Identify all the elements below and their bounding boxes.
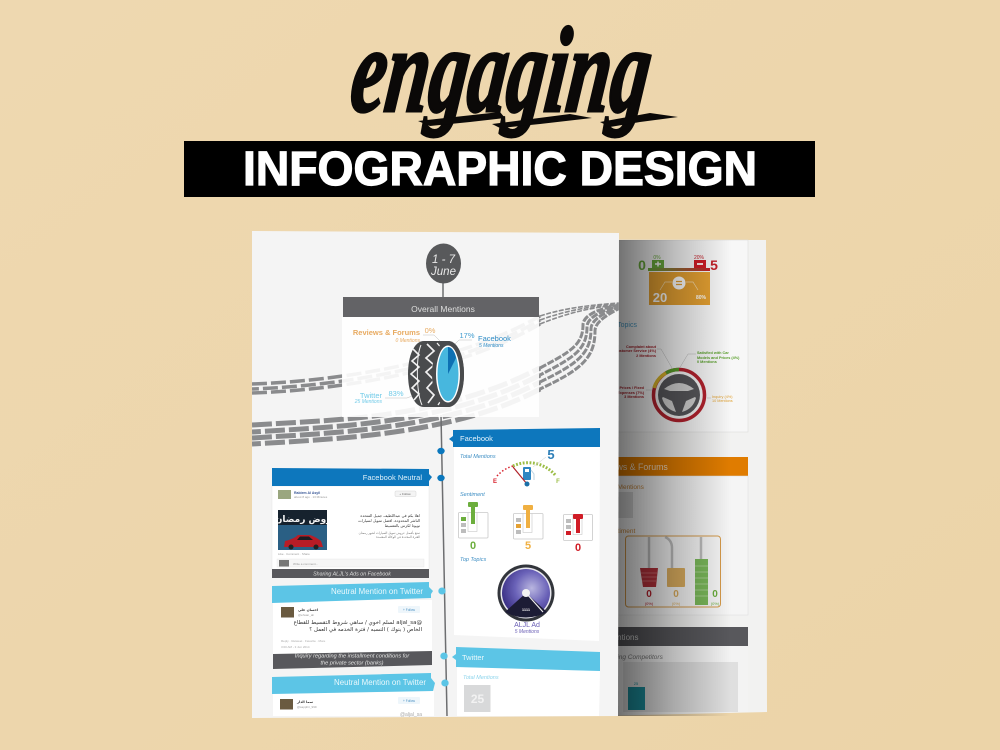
tweet two: + Follow	[403, 699, 416, 703]
tweet two	[280, 697, 422, 718]
facebook header	[449, 428, 600, 447]
panel: reviews sentiment pedals: 0	[646, 589, 652, 600]
back page shadow	[616, 240, 731, 716]
label: twitter	[354, 389, 412, 405]
panel: battery sentiment: 0%	[653, 255, 661, 261]
panel: top topics steering wheel: Complaint about	[626, 345, 657, 349]
panel: competitors chart	[596, 646, 748, 712]
panel: top topics steering wheel: Satisfied with Car	[697, 351, 729, 355]
facebook post: الناشر المحدودة، افضل تمويل لسيارات	[358, 518, 420, 523]
panel: battery sentiment: 20	[653, 290, 667, 305]
twitter one caption: the private sector (banks)	[320, 660, 384, 666]
shifter: negative: 0	[575, 542, 581, 554]
panel: top topics steering wheel	[604, 322, 740, 420]
facebook neutral header: Facebook Neutral	[363, 473, 422, 482]
timeline dots	[437, 448, 449, 686]
header: reviews and forums	[594, 457, 748, 476]
total mentions fuel gauge: Total Mentions	[460, 454, 496, 460]
twitter one header: Neutral Mention on Twitter	[331, 587, 423, 596]
panel: competitors chart: Regarding Competitors	[596, 654, 664, 661]
panel: twitter summary	[452, 647, 600, 716]
facebook panel body	[454, 447, 600, 641]
label: facebook: 17%	[459, 331, 475, 340]
label: facebook: 5 Mentions	[479, 343, 504, 349]
twitter one header	[272, 582, 433, 603]
facebook neutral caption: Sharing ALJL's Ads on Facebook	[313, 572, 391, 578]
panel: reviews sentiment pedals: (0%)	[711, 601, 720, 606]
twitter header	[452, 647, 600, 671]
facebook post: تمتع بأفضل عروض تمويل السيارات لشهر رمضان	[359, 530, 420, 535]
facebook post: Rabiem Al Asyil	[294, 491, 320, 495]
panel: top topics steering wheel: Models and Prices (4%)	[697, 356, 740, 360]
tweet one: @aljal_sa لسلم اخوي / ساهي شروط التقسيط للقطاع	[294, 620, 422, 626]
panel: reviews sentiment pedals	[600, 476, 748, 615]
label: reviews and forums: 0%	[425, 326, 436, 335]
twitter two body	[273, 691, 434, 716]
facebook post	[275, 490, 424, 567]
title: engaging	[345, 3, 678, 138]
twitter header: Twitter	[462, 653, 485, 662]
facebook neutral body	[272, 486, 429, 570]
panel: battery sentiment: 20%	[694, 255, 705, 261]
total mentions fuel gauge: 5	[547, 447, 555, 462]
panel: battery sentiment: 5	[710, 257, 718, 273]
tweet two: سما الدار	[296, 700, 314, 704]
panel: top topics steering wheel: 3 Mentions	[624, 395, 644, 399]
panel: top topics steering wheel: Expenses (7%)	[617, 391, 645, 395]
date badge	[426, 244, 461, 284]
label: twitter: 25 Mentions	[354, 399, 382, 405]
tweet two: @sapphir_999	[297, 705, 317, 709]
label: reviews and forums: Reviews & Forums	[353, 328, 420, 337]
overall mentions header: Overall Mentions	[411, 304, 475, 314]
tweet one: @ehsan_ali	[298, 613, 314, 617]
tweet one: Reply · Retweet · Favorite · More	[281, 639, 326, 643]
header: mentions	[600, 627, 748, 646]
twitter two header	[272, 673, 435, 694]
label: twitter: 83%	[388, 389, 404, 398]
twitter total mentions	[463, 675, 499, 712]
sentiment gear shifters	[458, 492, 592, 554]
total mentions fuel gauge: E	[493, 479, 497, 485]
tweet one: الخاص ( بنوك ) النسبه / فترة الخدمه في العمل ؟	[309, 627, 422, 633]
post image: عروض رمضان	[275, 515, 338, 525]
date badge: 1 - 7	[432, 254, 456, 266]
card: facebook neutral	[272, 468, 432, 578]
post image	[278, 510, 327, 550]
shifter: neutral: 5	[525, 540, 531, 552]
top topics speedometer: ALJL Ad	[514, 622, 540, 629]
facebook neutral caption	[272, 569, 429, 578]
label: twitter: Twitter	[360, 391, 382, 400]
panel: battery sentiment: 0	[638, 257, 646, 273]
facebook post: Like · Comment · Share	[278, 552, 310, 556]
twitter one body	[273, 600, 432, 654]
panel: reviews sentiment pedals: (0%)	[672, 601, 681, 606]
total mentions fuel gauge: F	[556, 479, 560, 485]
panel: top topics steering wheel: Customer Service (4%)	[615, 349, 657, 353]
top topics speedometer: 1111	[522, 607, 531, 612]
panel: reviews sentiment pedals: 0	[712, 589, 718, 600]
facebook header: Facebook	[460, 434, 493, 443]
front page	[252, 231, 620, 718]
twitter total mentions: Total Mentions	[463, 675, 499, 681]
twitter panel body	[457, 667, 600, 716]
top topics speedometer: 5 Mentions	[515, 629, 540, 635]
panel: reviews sentiment pedals: Sentiment	[606, 528, 635, 535]
facebook neutral header	[272, 468, 432, 486]
date badge: June	[430, 266, 456, 278]
header: reviews and forums: Reviews & Forums	[594, 462, 668, 472]
panel: reviews sentiment pedals: (0%)	[645, 601, 654, 606]
facebook post: about 8 ago · 13 Minutes	[294, 495, 328, 499]
sentiment gear shifters: Sentiment	[460, 492, 485, 498]
total mentions fuel gauge	[460, 447, 560, 486]
tweet two: @aljal_sa	[400, 712, 422, 718]
panel: reviews sentiment pedals: 0	[673, 589, 679, 600]
top topics speedometer: Top Topics	[460, 557, 486, 563]
icon: tyre pie	[408, 341, 464, 407]
label: facebook: Facebook	[478, 334, 511, 343]
label: reviews and forums: 0 Mentions	[396, 338, 420, 344]
back page sheet	[600, 240, 767, 716]
tweet one: + Follow	[403, 608, 416, 612]
label: reviews and forums	[353, 326, 441, 344]
back page	[594, 240, 767, 716]
card: neutral mention on twitter two	[272, 673, 435, 718]
facebook post: Write a comment...	[293, 562, 318, 566]
panel: top topics steering wheel: 0 Mentions	[697, 360, 717, 364]
panel: top topics steering wheel: 10 Mentions	[712, 399, 733, 403]
panel: overall mentions	[342, 297, 539, 417]
tweet one	[281, 606, 422, 649]
panel: battery sentiment	[610, 240, 748, 432]
panel: facebook summary	[449, 428, 600, 641]
panel: competitors chart: 25	[634, 681, 639, 686]
panel: top topics steering wheel: Prices / Fixed	[620, 386, 645, 390]
panel: battery sentiment: 80%	[696, 295, 707, 301]
tweet one: 3:00 AM - 3 Jun 2014	[281, 645, 310, 649]
panel: top topics steering wheel: Top Topics	[604, 322, 637, 329]
title: engaging: engaging	[345, 3, 659, 138]
facebook post: اهلا بكم في عبداللطيف جميل المتحدة	[360, 513, 420, 518]
header: mentions: Mentions	[606, 633, 638, 642]
twitter one caption	[273, 651, 432, 669]
twitter two header: Neutral Mention on Twitter	[334, 678, 426, 687]
twitter total mentions: 25	[471, 692, 484, 706]
front page sheet	[252, 231, 619, 718]
card: neutral mention on twitter one	[272, 582, 433, 669]
panel: top topics steering wheel: 2 Mentions	[636, 354, 656, 358]
twitter one caption: Inquiry regarding the installment conditions for	[295, 654, 410, 660]
overall mentions card	[342, 317, 539, 417]
label: facebook	[455, 331, 511, 349]
top topics speedometer	[460, 557, 554, 635]
tweet one: احسان علي	[298, 608, 318, 612]
panel: top topics steering wheel: Inquiry (4%)	[712, 395, 733, 399]
shifter: positive: 0	[470, 540, 476, 552]
facebook post: تويوتا لكزس بالتقسيط	[385, 523, 420, 528]
facebook post: + Follow	[399, 492, 411, 496]
timeline line	[441, 283, 447, 716]
panel: reviews sentiment pedals: Total Mentions	[602, 484, 645, 491]
facebook post: الفترة المحددة في الوكالة المعتمدة	[376, 535, 420, 539]
tyre tracks	[252, 303, 620, 444]
overall mentions header	[343, 297, 539, 317]
title banner: infographic design: INFOGRAPHIC DESIGN	[243, 143, 757, 196]
